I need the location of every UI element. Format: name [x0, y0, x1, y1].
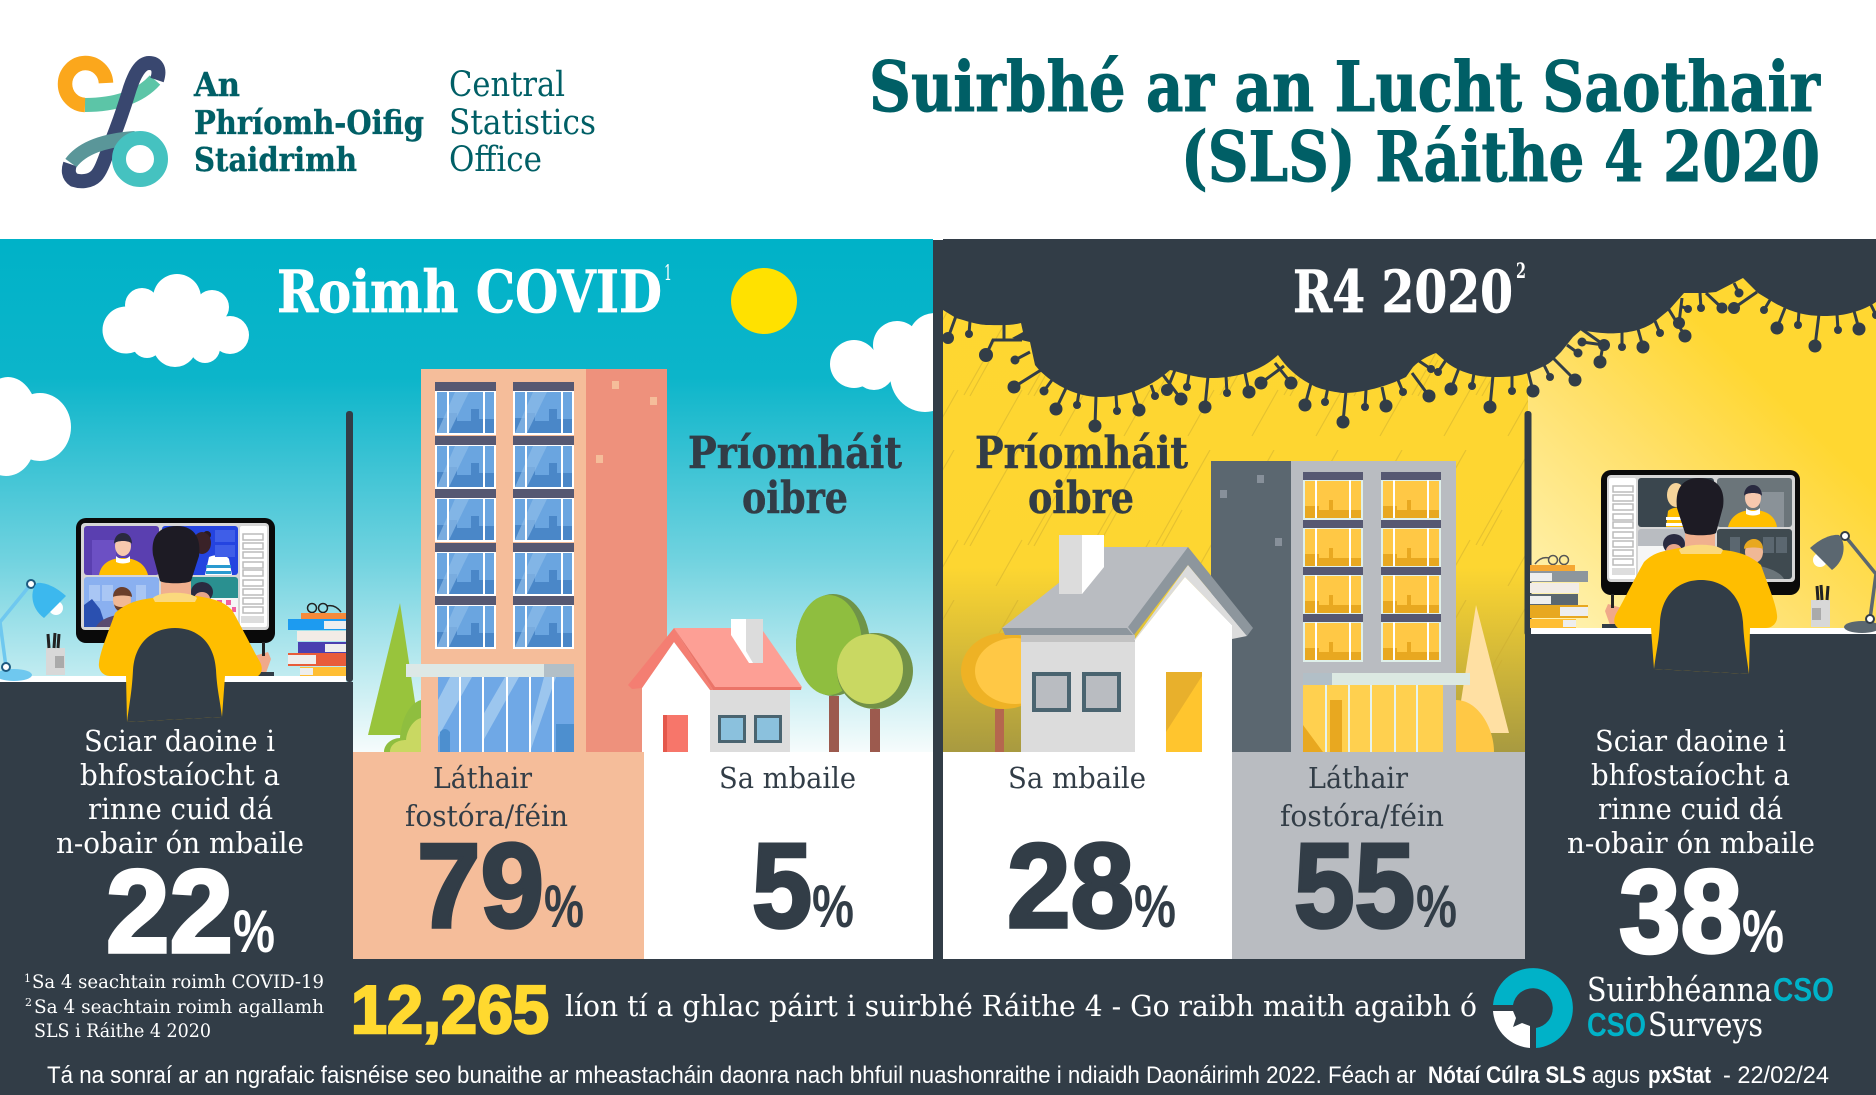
- sample size: 12,265 households: líon tí a ghlac páirt i suirbhé Ráithe 4 - Go raibh maith agaibh ó: [565, 989, 1477, 1023]
- footer note: Tá na sonraí ar an ngrafaic faisnéise seo bunaithe ar mheastacháin daonra nach bhfuil nuashonraithe i ndiaidh Daonáirimh 2022. Féach ar: [47, 1062, 1416, 1089]
- pen pot: [1811, 585, 1830, 627]
- label: main workplace left: [688, 428, 903, 524]
- person at desk: [1602, 478, 1777, 674]
- beige tree: [1456, 605, 1509, 752]
- autumn tree: [961, 633, 1055, 752]
- heading: Roimh COVID: Roimh COVID: [277, 258, 662, 326]
- panel: before COVID scene: [0, 239, 962, 752]
- stat box: employer/own premises Q4 2020 55%: fostóra/féin: [1280, 799, 1444, 833]
- CSO Surveys logo: CSO: [1773, 971, 1834, 1008]
- sample size: 12,265 households: [351, 972, 1477, 1048]
- tree beside office: [368, 603, 421, 752]
- stat box: employer/own premises before COVID 79%: %: [544, 873, 584, 940]
- stat box: employer/own premises Q4 2020 55%: Láthair: [1308, 761, 1408, 795]
- logo wordmark Irish: An: [193, 65, 240, 104]
- footer note: pxStat: [1648, 1062, 1711, 1089]
- footnotes: Sa 4 seachtain roimh COVID-19: [32, 971, 324, 993]
- stat text left: share who worked from home 22%: n-obair ón mbaile: [56, 826, 304, 860]
- footnotes: Sa 4 seachtain roimh agallamh: [34, 996, 324, 1018]
- stat text right: share who worked from home 38%: %: [1742, 898, 1784, 965]
- stat text right: share who worked from home 38%: rinne cuid dá: [1598, 792, 1783, 826]
- stack of books: [288, 604, 346, 676]
- logo wordmark Irish: Staidrimh: [194, 140, 357, 179]
- monitor: [1601, 470, 1800, 595]
- logo wordmark English: Office: [449, 140, 542, 180]
- stat text left: share who worked from home 22%: rinne cuid dá: [88, 792, 273, 826]
- CSO Surveys logo: Surveys: [1648, 1005, 1763, 1044]
- label: main workplace right: oibre: [1028, 473, 1134, 524]
- stack of books: [1530, 556, 1588, 628]
- stat box: employer/own premises before COVID 79%: [353, 752, 644, 959]
- desk lamp: [0, 580, 66, 681]
- stat box: employer/own premises before COVID 79%: 79: [417, 819, 544, 953]
- stat box: at home Q4 2020 28%: Sa mbaile: [1008, 761, 1146, 795]
- footnotes: [24, 971, 324, 1042]
- heading: R4 2020: R4 2020: [1293, 258, 1513, 326]
- logo symbol: [65, 63, 161, 181]
- label: main workplace left: oibre: [742, 473, 848, 524]
- CSO Surveys logo: [1493, 968, 1834, 1048]
- logo wordmark English: [449, 65, 596, 180]
- right home-office scene: [1524, 411, 1876, 764]
- logo: Central Statistics Office: [65, 63, 596, 181]
- footnotes: 1: [24, 972, 31, 985]
- stat box: at home Q4 2020 28%: [943, 752, 1232, 959]
- footer note: - 22/02/24: [1723, 1062, 1829, 1089]
- stat text right: share who worked from home 38%: Sciar daoine i: [1595, 724, 1786, 758]
- stat box: employer/own premises Q4 2020 55%: %: [1416, 873, 1457, 940]
- stat box: employer/own premises before COVID 79%: Láthair: [433, 761, 532, 795]
- stat text right: share who worked from home 38%: n-obair ón mbaile: [1567, 826, 1815, 860]
- CSO Surveys logo: Suirbhéanna: [1587, 970, 1772, 1009]
- logo wordmark Irish: [193, 65, 424, 179]
- stat text right: share who worked from home 38%: 38: [1619, 846, 1742, 978]
- cloud left edge: [0, 377, 71, 476]
- footnotes: 2: [25, 996, 32, 1009]
- stat text right: share who worked from home 38%: bhfostaíocht a: [1591, 758, 1790, 792]
- grey house: [1002, 535, 1253, 752]
- stat box: at home before COVID 5%: 5: [752, 819, 812, 953]
- logo wordmark English: Statistics: [449, 103, 596, 143]
- footnotes: SLS i Ráithe 4 2020: [34, 1020, 211, 1042]
- stat text left: share who worked from home 22%: [56, 724, 304, 978]
- heading: R4 2020: 2: [1516, 258, 1526, 283]
- stat text left: share who worked from home 22%: 22: [106, 846, 233, 978]
- office building: [406, 369, 667, 752]
- label: main workplace left: Príomháit: [688, 428, 903, 479]
- storm cloud with drips: [942, 239, 1876, 432]
- panel: Q4 2020 scene: [943, 240, 1876, 752]
- stat box: at home before COVID 5%: [644, 752, 933, 959]
- stat box: at home Q4 2020 28%: %: [1134, 873, 1176, 940]
- footer note: Nótaí Cúlra SLS: [1428, 1062, 1586, 1089]
- heading: Roimh COVID: 1: [664, 261, 672, 285]
- cloud right edge: [830, 313, 933, 412]
- CSO Surveys logo: CSO: [1587, 1006, 1646, 1043]
- person at desk: [99, 526, 274, 722]
- sun: [731, 268, 797, 334]
- label: main workplace right: [975, 428, 1189, 524]
- trees beside house: [796, 594, 913, 752]
- left home-office scene: [0, 411, 353, 772]
- stat text left: share who worked from home 22%: Sciar daoine i: [84, 724, 275, 758]
- logo wordmark Irish: Phríomh-Oifig: [194, 103, 424, 142]
- label: main workplace right: Príomháit: [975, 428, 1189, 479]
- desk lamp: [1810, 532, 1876, 633]
- stat text right: share who worked from home 38%: [1567, 724, 1815, 978]
- monitor: [76, 518, 275, 643]
- stat text left: share who worked from home 22%: bhfostaíocht a: [80, 758, 280, 792]
- stat box: at home before COVID 5%: %: [812, 873, 854, 940]
- stat text left: share who worked from home 22%: %: [233, 898, 275, 965]
- sample size: 12,265 households: 12,265: [351, 972, 549, 1048]
- stat box: employer/own premises before COVID 79%: fostóra/féin: [405, 799, 568, 833]
- grey building: [1211, 461, 1470, 752]
- footer note: agus: [1592, 1062, 1640, 1089]
- logo wordmark English: Central: [449, 65, 565, 105]
- page background: [0, 240, 1876, 1095]
- stat box: employer/own premises Q4 2020 55%: [1232, 752, 1525, 959]
- stat box: employer/own premises Q4 2020 55%: 55: [1294, 819, 1415, 953]
- pen pot: [46, 633, 65, 675]
- house: [628, 619, 802, 752]
- title: [869, 47, 1821, 198]
- icon: speech ring: [1493, 968, 1573, 1048]
- stat box: at home before COVID 5%: Sa mbaile: [719, 761, 856, 795]
- cloud top left: [102, 274, 249, 367]
- stat box: at home Q4 2020 28%: 28: [1007, 819, 1134, 953]
